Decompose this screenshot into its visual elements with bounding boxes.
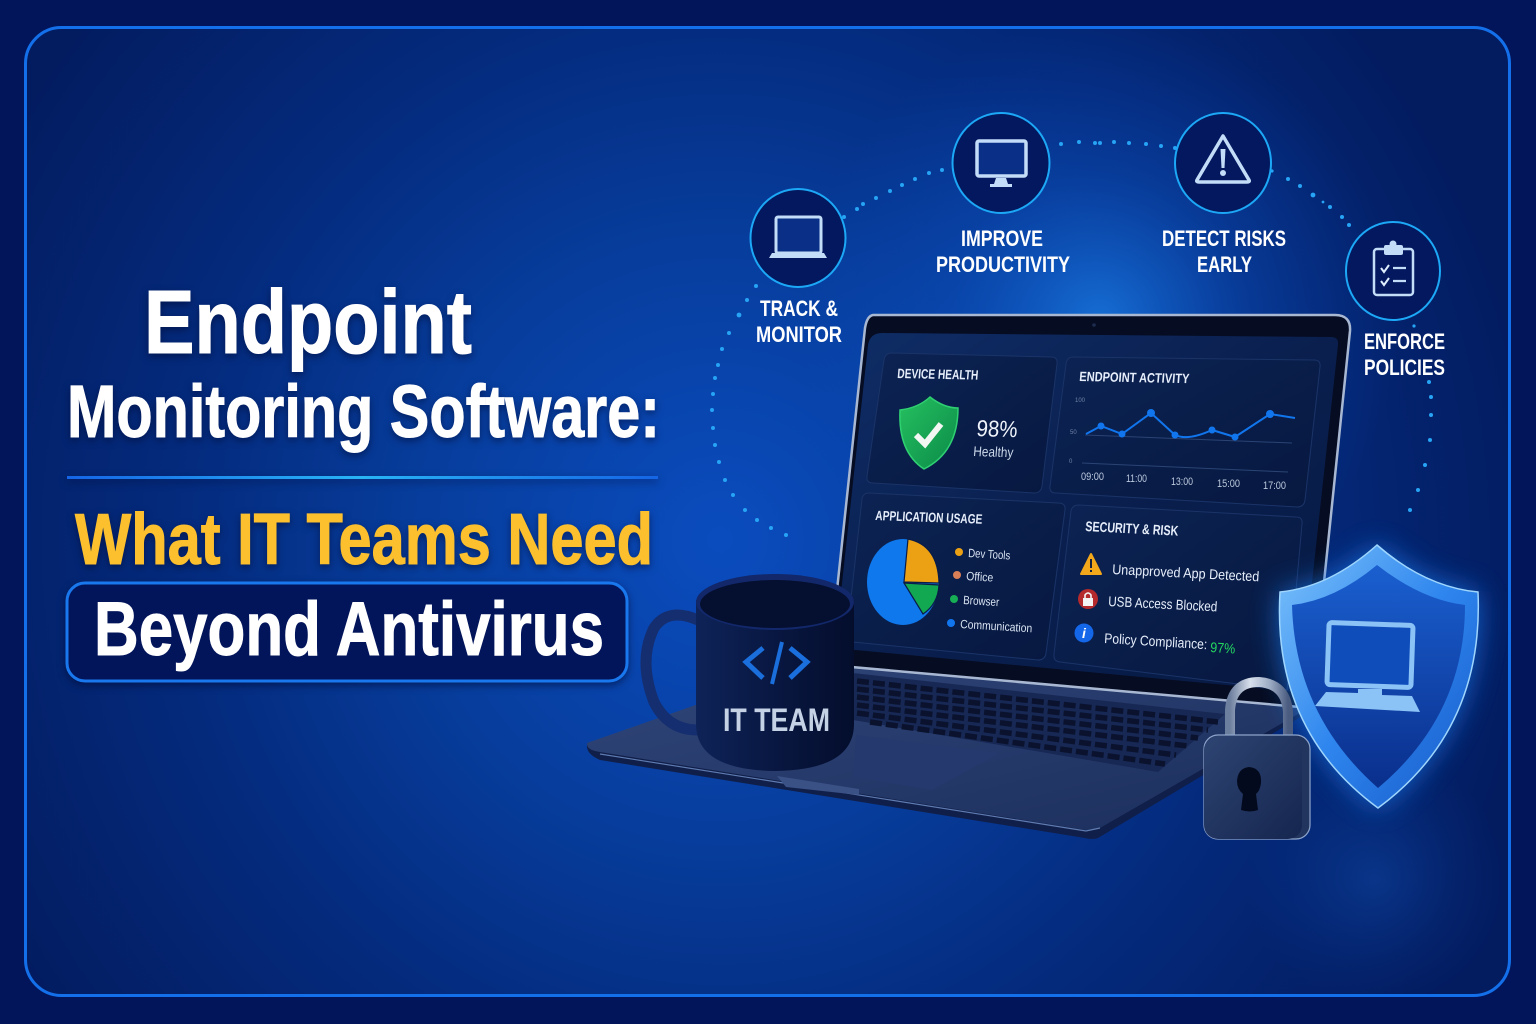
line chart: 09:00: [1081, 471, 1104, 483]
icon: code brackets: [746, 642, 807, 684]
metric: 98 percent healthy: [973, 415, 1019, 460]
lock body: [1204, 735, 1310, 839]
label: Improve Productivity: [936, 226, 1070, 277]
label: Improve Productivity: IMPROVE: [961, 226, 1043, 251]
heading: application usage: APPLICATION USAGE: [875, 508, 983, 527]
line chart: 100: [1075, 398, 1086, 404]
icon: clipboard, Enforce Policies: [1346, 222, 1440, 320]
line chart: 15:00: [1217, 478, 1240, 490]
title: Endpoint: Endpoint: [144, 273, 472, 373]
line chart: 50: [1070, 430, 1077, 436]
label: Enforce Policies: POLICIES: [1364, 355, 1445, 380]
panel: device health: [867, 353, 1057, 493]
line chart: 0: [1069, 459, 1073, 465]
alert: policy compliance: Policy Compliance:: [1104, 630, 1208, 652]
dotted arc connecting the icons: [710, 140, 1433, 537]
line chart: 11:00: [1126, 473, 1147, 485]
panel: application usage: [847, 493, 1065, 660]
legend: Dev Tools: [968, 546, 1011, 563]
line chart: [1069, 398, 1295, 492]
panel: security and risk: [1054, 505, 1302, 690]
legend: Office: [966, 569, 994, 585]
laptop base deck: [587, 658, 1312, 839]
icon: warning triangle, Detect Risks Early: [1175, 113, 1271, 213]
metric: 98 percent healthy: Healthy: [973, 443, 1014, 460]
alert: unapproved app: Unapproved App Detected: [1112, 561, 1260, 584]
mug text: IT TEAM: [723, 702, 830, 738]
padlock: [1204, 682, 1310, 839]
label: Improve Productivity: PRODUCTIVITY: [936, 252, 1070, 277]
alert: policy compliance: [1074, 624, 1236, 656]
legend: Browser: [963, 593, 1000, 609]
laptop on shield: [1315, 623, 1420, 712]
label: Track and Monitor: [756, 296, 842, 347]
label: Detect Risks Early: EARLY: [1197, 252, 1252, 277]
metric: 98 percent healthy: 98%: [976, 415, 1019, 442]
screen display: [835, 333, 1338, 692]
panel: endpoint activity: [1050, 357, 1320, 507]
icon: laptop, Track and Monitor: [750, 189, 846, 287]
label: Detect Risks Early: DETECT RISKS: [1162, 226, 1286, 251]
label: Enforce Policies: [1364, 329, 1445, 380]
shield inner: [1292, 565, 1465, 788]
mug rim: [696, 574, 854, 630]
coffee mug: [646, 574, 854, 771]
heading: device health: DEVICE HEALTH: [897, 366, 979, 383]
line chart: 17:00: [1263, 480, 1286, 492]
alert: unapproved app: [1081, 554, 1260, 584]
divider line: [67, 476, 658, 479]
label: Track and Monitor: TRACK &: [760, 296, 838, 321]
label: Track and Monitor: MONITOR: [756, 322, 842, 347]
screen bezel: [829, 315, 1350, 708]
shield outer: [1279, 545, 1478, 808]
alert: policy compliance: 97%: [1210, 639, 1236, 656]
icon: green shield with check: [900, 397, 958, 469]
icon: monitor, Improve Productivity: [952, 113, 1050, 213]
subtitle: What IT Teams Need: What IT Teams Need: [75, 500, 653, 580]
pie chart: [867, 539, 939, 625]
legend: [947, 546, 1033, 635]
title: Monitoring Software: Monitoring Software:: [67, 370, 660, 453]
keyhole: [1237, 767, 1261, 812]
label: Detect Risks Early: [1162, 226, 1286, 277]
mug body: [696, 600, 854, 771]
alert: policy compliance: i: [1082, 625, 1087, 641]
front notch: [777, 776, 859, 795]
heading: security and risk: SECURITY & RISK: [1085, 518, 1179, 539]
shield glow: [1279, 545, 1478, 808]
legend: Communication: [960, 617, 1033, 635]
alert: USB blocked: USB Access Blocked: [1108, 593, 1218, 614]
title block: [67, 273, 660, 681]
alert: USB blocked: [1078, 589, 1218, 614]
shield with laptop: [1279, 545, 1478, 808]
mug handle: [646, 615, 698, 730]
laptop: [587, 315, 1350, 839]
label: Enforce Policies: ENFORCE: [1364, 329, 1445, 354]
subtitle box: Beyond Antivirus: Beyond Antivirus: [94, 587, 604, 672]
trackpad: [853, 735, 1000, 790]
line chart: 13:00: [1171, 476, 1193, 488]
camera: [1092, 323, 1096, 327]
keyboard: [853, 673, 1225, 772]
shackle: [1230, 682, 1288, 742]
heading: endpoint activity: ENDPOINT ACTIVITY: [1079, 369, 1190, 386]
